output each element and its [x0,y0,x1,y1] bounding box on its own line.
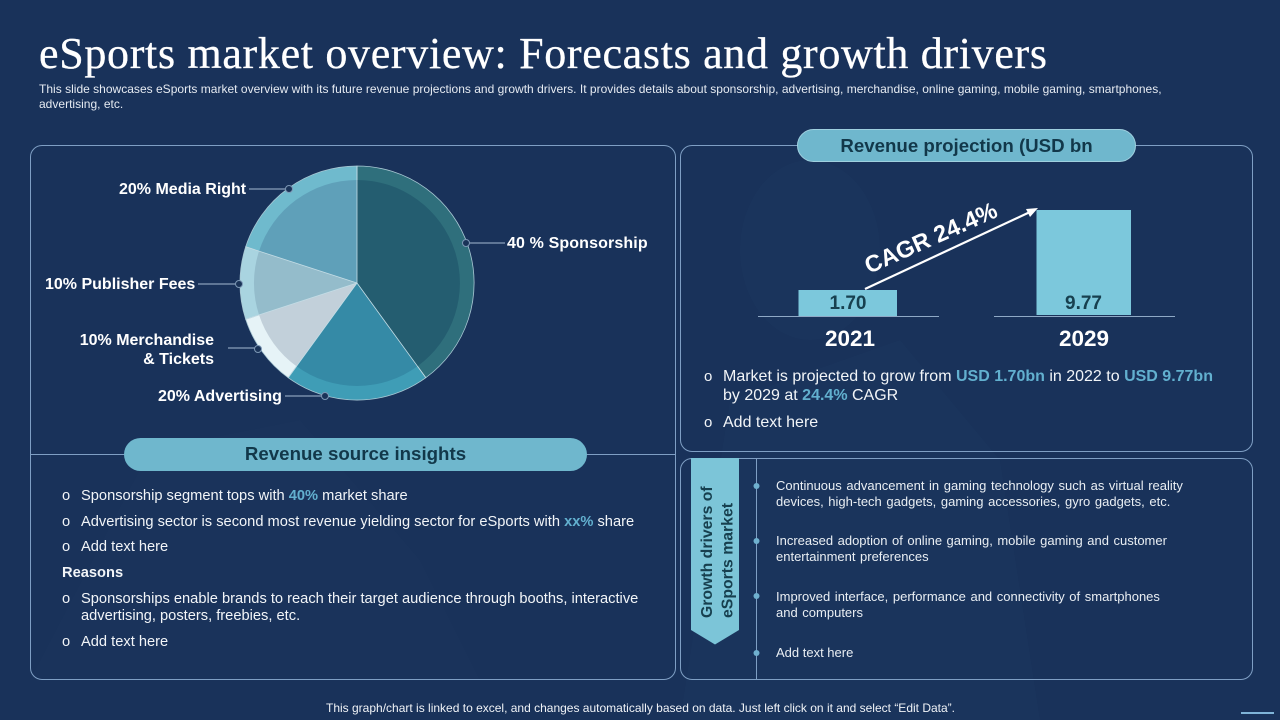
driver 2: entertainment preferences [776,549,929,564]
text block: projection [704,368,1213,431]
text block: insights: advertising, posters, freebies, etc. [81,608,300,624]
driver timeline dots [754,483,760,656]
panel: revenue sources [30,145,676,680]
text block: insights: Sponsorship segment tops with 40% market share [81,488,408,504]
text block: insights: Advertising sector is second most revenue yielding sector for eSports with xx% share [81,514,634,530]
CAGR label: CAGR 24.4% [860,197,1001,279]
pie leader lines [198,185,505,400]
projection bullet 2: o [704,414,712,431]
label: advertising: 20% Advertising [158,388,282,405]
driver 1: Continuous advancement in gaming technology such as virtual reality [776,478,1183,492]
projection bullet 1: o [704,368,712,385]
heading: revenue source insights [124,438,587,471]
text block: insights [62,488,638,650]
pie chart [240,166,474,400]
insight 2: o [62,514,70,530]
value 1.70: 1.70 [830,293,866,314]
text block: insights: Add text here [81,634,168,650]
text block: insights: Add text here [81,539,168,555]
driver 3: and computers [776,605,863,620]
subtitle: This slide showcases eSports market overview with its future revenue projections and growth drivers. It provides details about sponsorship, advertising, merchandise, online gaming, mobile gaming, smartphones, [39,82,1162,96]
text block: projection: Market is projected to grow from USD 1.70bn in 2022 to USD 9.77bn [723,368,1213,385]
slice: publisher fees [240,247,357,319]
driver 1: devices, high-tech gadgets, gaming accessories, gyro gadgets, etc. [776,494,1170,508]
arrow [865,208,1038,289]
text block: projection: Add text here [723,414,818,431]
bar 2021 [798,290,897,316]
growth drivers banner: Growth drivers of [699,486,716,618]
reason 2: o [62,634,70,650]
label: publisher fees: 10% Publisher Fees [45,276,195,293]
axis lines [758,316,1175,318]
bar 2029 [1036,210,1131,315]
subtitle [39,82,1162,110]
heading: revenue projection [797,129,1136,162]
driver 2: Increased adoption of online gaming, mobile gaming and customer [776,533,1167,548]
driver 2 [776,533,1167,564]
label: merchandise and tickets: 10% Merchandise [80,332,214,349]
inner pie shades [254,180,460,386]
text block: insights: Sponsorships enable brands to reach their target audience through booths, interactive [81,591,638,607]
label: media right: 20% Media Right [119,181,246,198]
insight 3: o [62,539,70,555]
slice: merchandise [246,283,357,378]
reason 1: o [62,591,70,607]
insight 1: o [62,488,70,504]
panel: growth drivers [680,458,1253,680]
slice: sponsorship [357,166,474,378]
driver 3 [776,589,1160,620]
growth drivers banner: eSports market [720,502,736,618]
title: eSports market overview: Forecasts and growth drivers [39,29,1048,78]
footer note: This graph/chart is linked to excel, and changes automatically based on data. Just left click on it and select “Edit Data”. [326,701,955,715]
reasons heading: Reasons [62,565,123,581]
driver 1 [776,478,1183,508]
label: sponsorship: 40 % Sponsorship [507,235,648,252]
page number bar [1241,712,1274,714]
heading: revenue source insights: Revenue source insights [245,443,466,464]
value 9.77: 9.77 [1065,293,1102,314]
label: merchandise and tickets [80,332,214,368]
text block: projection: by 2029 at 24.4% CAGR [723,387,898,404]
vertical divider line [756,459,757,679]
driver 4: Add text here [776,645,853,660]
slice: advertising [288,283,426,400]
year 2021: 2021 [825,326,875,351]
subtitle: advertising, etc. [39,96,123,110]
heading: revenue projection: Revenue projection (USD bn [840,135,1093,156]
bar chart [758,197,1175,351]
growth drivers banner [691,458,739,644]
panel: revenue projection [680,145,1253,452]
label: merchandise and tickets: & Tickets [143,351,214,368]
year 2029: 2029 [1059,326,1109,351]
driver 3: Improved interface, performance and connectivity of smartphones [776,589,1160,604]
slice: media right [246,166,357,283]
divider line [31,454,675,455]
